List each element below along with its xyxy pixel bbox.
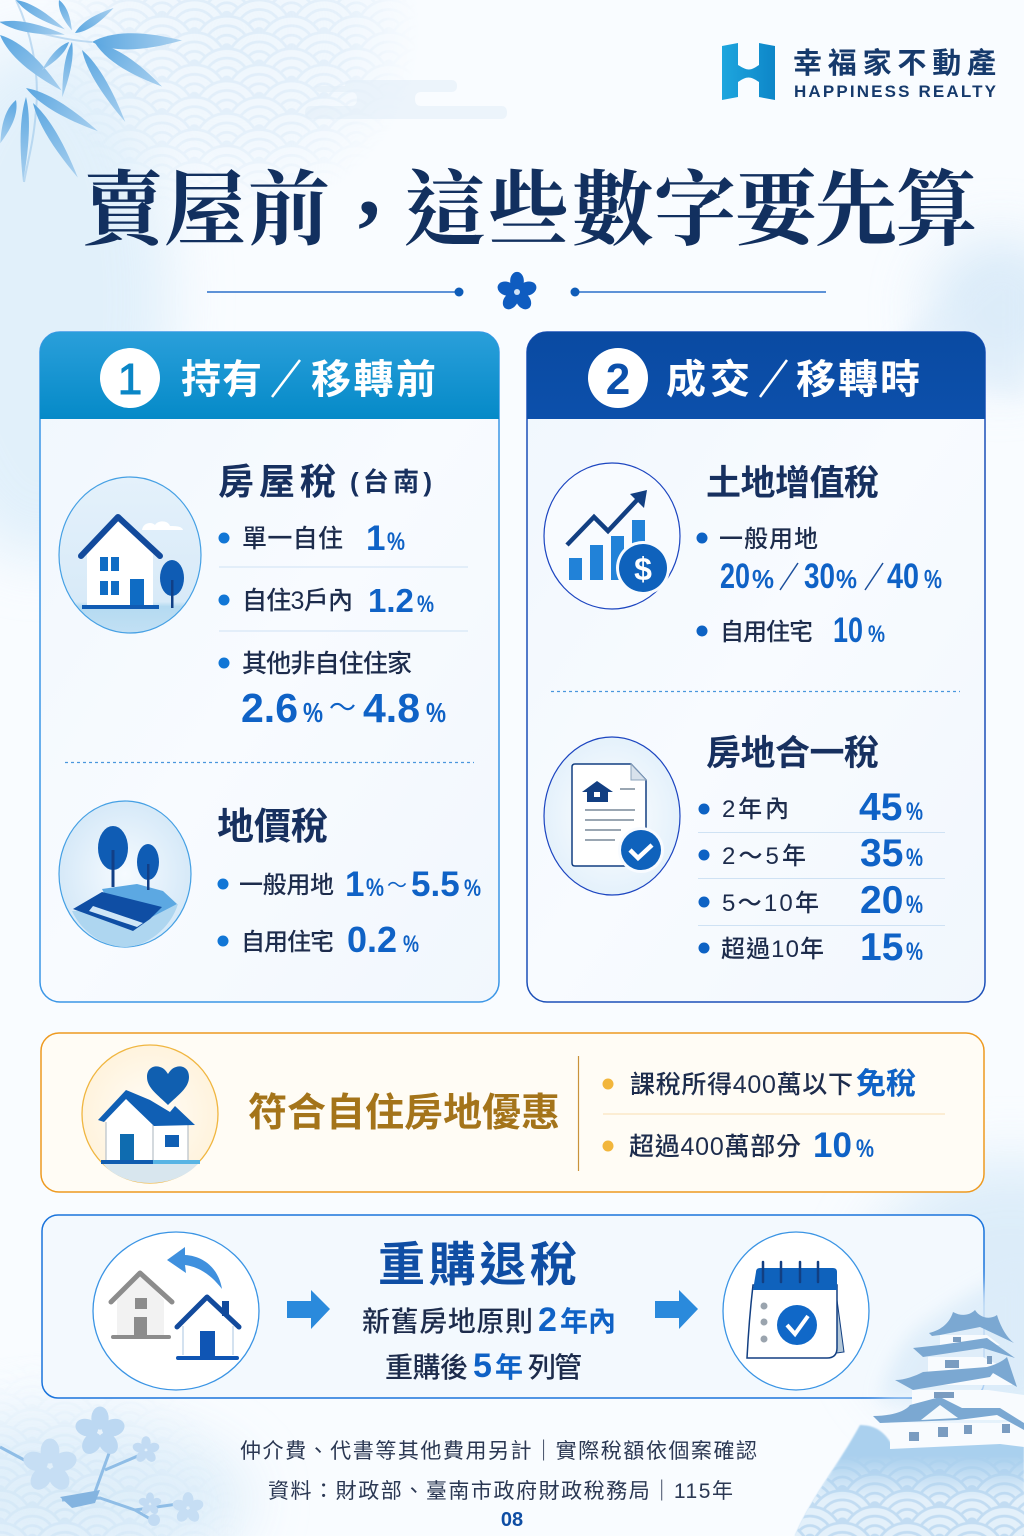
badge number 2: 2: [606, 355, 630, 404]
preference row: 課稅所得400萬以下: [630, 1071, 853, 1099]
arrow: [287, 1290, 330, 1329]
rate row: %: [426, 697, 446, 728]
panel body: [40, 332, 499, 1002]
rate row: 4.8: [363, 685, 420, 731]
panel heading: 持有: [181, 358, 262, 402]
refund heading: 重購退稅: [378, 1238, 577, 1291]
logo company name: 幸福家不動產: [793, 47, 996, 80]
preference row: 10: [813, 1126, 852, 1165]
rate row: 其他非自住住家: [242, 650, 412, 678]
panel header: [40, 332, 499, 419]
rate row: 30: [804, 557, 835, 596]
refund line two: 年: [495, 1352, 523, 1383]
section: house tax: [218, 461, 468, 731]
footer source line two: 資料：財政部、臺南市政府財政稅務局｜115年: [268, 1480, 733, 1503]
preference row: [602, 1068, 916, 1101]
rate row: [698, 832, 923, 875]
rate row: 5.5: [411, 865, 460, 904]
decoration: cherry blossom branch: [0, 1407, 205, 1526]
panel heading: [181, 358, 436, 402]
rate row: [218, 582, 434, 619]
rate row: %: [464, 875, 481, 902]
rate row: %: [366, 874, 384, 902]
rate row: 自用住宅: [720, 619, 813, 646]
title divider with flower: [207, 272, 826, 312]
panel heading: [666, 358, 920, 402]
rate row: 40: [887, 557, 919, 596]
rate row: [698, 879, 923, 922]
rate row: 2～5年: [722, 843, 806, 870]
icon: chart and coin: $: [634, 551, 652, 587]
icon: house with heart: [82, 1045, 218, 1183]
preference row: [602, 1126, 874, 1165]
rate row: 35: [860, 832, 903, 875]
rate row: [218, 919, 419, 960]
rate row: %: [752, 564, 774, 594]
section: integrated housing and land tax: [698, 734, 945, 969]
rate row: 5～10年: [722, 890, 819, 917]
title: ,: [358, 136, 380, 235]
rate row: ～: [329, 693, 356, 723]
rate row: [696, 526, 942, 596]
rate row: %: [417, 591, 434, 618]
preference row: 超過400萬部分: [629, 1133, 801, 1161]
rate row: 1: [366, 519, 385, 558]
rate row: 一般用地: [239, 872, 334, 899]
rate row: [696, 611, 885, 650]
icon: document with check: [544, 737, 680, 895]
rate row: [218, 650, 446, 731]
rate row: 20: [860, 879, 903, 922]
heading: 房屋稅: [218, 461, 336, 502]
heading: 地價稅: [217, 806, 328, 847]
preference row: 免稅: [856, 1068, 916, 1101]
panel: owner-occupied preference: [41, 1033, 984, 1192]
rate row: [218, 519, 405, 558]
badge number 1: 1: [118, 355, 142, 404]
panel: before transfer: [40, 332, 499, 1002]
decoration: castle and mountains: [795, 1270, 1024, 1536]
rate row: 15: [860, 926, 903, 969]
rate row: 一般用地: [719, 526, 818, 553]
rate row: [698, 926, 923, 969]
section: land value tax: [217, 806, 481, 960]
arrow: [655, 1290, 698, 1329]
rate row: %: [906, 798, 923, 826]
panel body: [527, 332, 985, 1002]
logo mark: [722, 43, 775, 100]
rate row: 單一自住: [242, 525, 343, 553]
heading: 房地合一稅: [706, 734, 879, 773]
panel: repurchase tax refund: [42, 1215, 984, 1398]
rate row: 2年內: [722, 796, 789, 823]
rate row: 自住3戶內: [242, 587, 353, 615]
refund line one: 2: [538, 1301, 557, 1339]
rate row: 1: [345, 865, 364, 904]
rate row: %: [836, 564, 857, 594]
rate row: 45: [859, 786, 902, 829]
rate row: %: [868, 621, 885, 648]
footer note line one: 仲介費、代書等其他費用另計｜實際稅額依個案確認: [240, 1440, 757, 1463]
icon: calendar with check: [723, 1232, 869, 1390]
refund line two: 5: [473, 1347, 492, 1385]
section: land value increment tax: [696, 464, 942, 650]
preference row: %: [856, 1135, 874, 1163]
panel heading: 移轉時: [796, 358, 920, 402]
panel header: [527, 332, 985, 419]
rate row: 0.2: [347, 919, 397, 960]
rate row: 自用住宅: [241, 929, 334, 956]
rate row: [698, 786, 923, 829]
refund line one: 新舊房地原則: [362, 1306, 533, 1337]
badge number 1: [100, 348, 160, 408]
rate row: 20: [720, 557, 750, 596]
logo: [722, 43, 997, 101]
rate row: %: [303, 697, 323, 728]
rate row: 1.2: [368, 582, 414, 619]
rate row: 10: [833, 611, 863, 650]
icon: land and trees: [59, 801, 191, 947]
icon: old and new houses: [93, 1232, 259, 1390]
rate row: %: [403, 931, 419, 958]
panel heading: 移轉前: [311, 358, 436, 402]
rate row: [218, 865, 481, 904]
refund line two: 重購後: [385, 1352, 468, 1383]
heading: 土地增值稅: [706, 464, 879, 503]
rate row: ～: [387, 875, 407, 897]
panel: at closing: [527, 332, 985, 1002]
rate row: %: [906, 891, 923, 919]
rate row: %: [906, 844, 923, 872]
refund line two: 列管: [528, 1352, 582, 1383]
logo english name: HAPPINESS REALTY: [794, 82, 997, 101]
rate row: 2.6: [241, 685, 298, 731]
icon: chart and coin: [544, 463, 680, 609]
preference heading: 符合自住房地優惠: [248, 1092, 560, 1135]
rate row: 超過10年: [721, 936, 824, 963]
title: 賣屋前這些數字要先算: [82, 165, 977, 256]
rate row: %: [906, 938, 923, 966]
page number: 08: [501, 1509, 523, 1531]
decoration: bamboo leaves: [0, 0, 182, 182]
refund line one: 年內: [560, 1306, 616, 1337]
badge number 2: [588, 348, 648, 408]
heading note: (台南): [350, 467, 432, 497]
icon: house: [59, 477, 201, 633]
panel heading: 成交: [666, 358, 750, 402]
rate row: %: [387, 528, 405, 556]
rate row: %: [924, 564, 942, 594]
